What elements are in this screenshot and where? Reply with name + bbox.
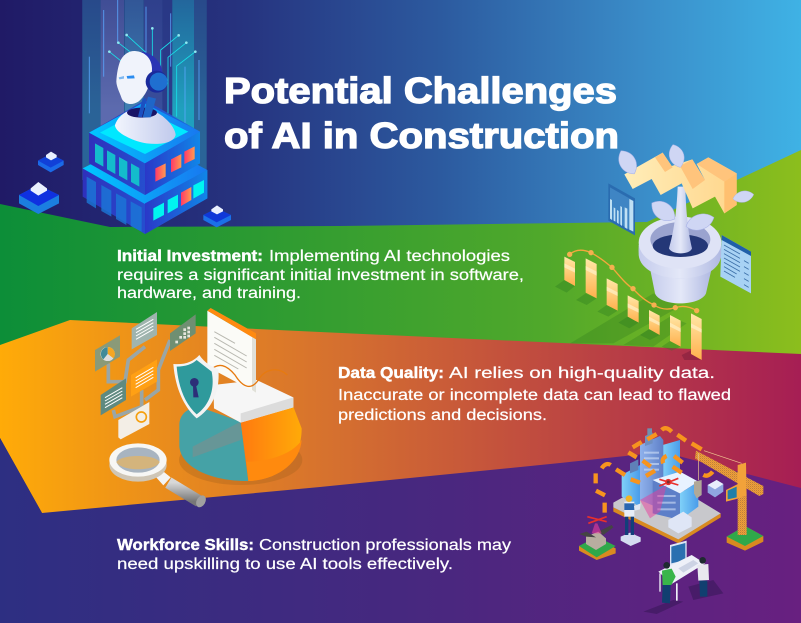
text block: initial investment: Implementing AI technologies (269, 248, 510, 265)
leaves (614, 142, 755, 234)
windows: upper right (155, 146, 195, 182)
shadows (570, 293, 687, 347)
light beam (82, 0, 207, 180)
text block: workforce skills: need upskilling to use AI tools effectively. (117, 556, 453, 573)
title: of AI in Construction (224, 115, 619, 156)
text block: data quality: Data Quality: (338, 365, 444, 382)
icon: floating cube lower (19, 182, 59, 214)
text block: initial investment: hardware, and training. (117, 285, 301, 302)
magnifying glass (109, 443, 208, 509)
engineer with helmet (621, 495, 641, 546)
drone package base (579, 517, 616, 560)
text block: data quality (338, 365, 731, 424)
illustration: plant with growth chart (555, 142, 755, 360)
pie chart (179, 380, 302, 485)
connector lines (108, 340, 170, 417)
text block: data quality: AI relies on high-quality data. (449, 365, 715, 382)
title (224, 70, 619, 156)
windows: lower left (87, 177, 142, 232)
robot head (115, 51, 176, 144)
panel: data quality band (0, 320, 801, 520)
text block: initial investment: Initial Investment: (117, 248, 263, 265)
illustration: smart construction site (579, 428, 763, 614)
text block: workforce skills: Construction professionals may (259, 537, 511, 554)
panel: initial investment band (0, 150, 801, 400)
workers at table (643, 541, 723, 614)
bar chart (555, 250, 702, 360)
text block: initial investment: requires a significant initial investment in software, (117, 267, 524, 284)
tower crane (694, 451, 763, 551)
icon: floating cube right (203, 205, 231, 227)
illustration: AI robot on server building (82, 0, 207, 234)
zigzag growth arrow (624, 153, 737, 213)
panel: title background band (0, 0, 801, 360)
text block: data quality: Inaccurate or incomplete data can lead to flawed (338, 387, 731, 404)
illustration: data security pie chart (95, 308, 302, 509)
icon: floating cube upper (38, 152, 64, 172)
text block: workforce skills: Workforce Skills: (117, 537, 254, 554)
dashed flight path (596, 428, 713, 513)
panel: workforce skills band (0, 438, 801, 623)
plant stem (669, 187, 692, 253)
flying drone (659, 478, 678, 486)
shield icon (173, 355, 219, 418)
platform (613, 477, 721, 543)
info cards (95, 312, 196, 439)
text block: data quality: predictions and decisions. (338, 407, 547, 424)
document card (720, 235, 751, 293)
text block: workforce skills (117, 537, 511, 573)
chart card (608, 183, 635, 235)
drone scan beam (640, 485, 667, 518)
pot (639, 217, 721, 303)
windows: lower right (153, 203, 164, 221)
document (207, 308, 287, 393)
title: Potential Challenges (224, 70, 617, 111)
windows: upper left (95, 143, 139, 187)
towers (622, 428, 698, 533)
server building (83, 100, 207, 234)
cargo block (708, 480, 723, 497)
text block: initial investment (117, 248, 524, 302)
circuit lines (108, 27, 197, 117)
